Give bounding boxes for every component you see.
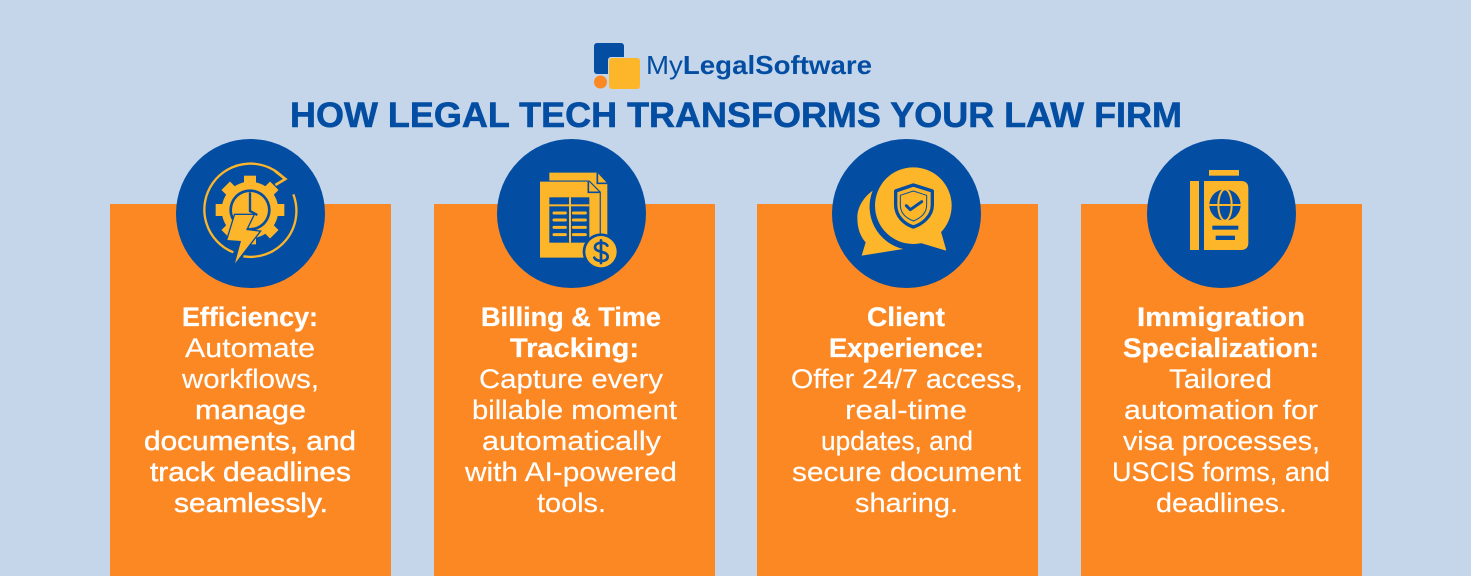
icon: chat bubbles with shield — [832, 139, 981, 288]
text: efficiency description: Automate — [185, 333, 315, 363]
text: efficiency description: seamlessly. — [174, 488, 328, 518]
text: client experience description: real-time — [845, 395, 967, 425]
panel: immigration specialization — [1081, 139, 1362, 576]
text: immigration description — [1112, 364, 1330, 518]
heading: billing and time tracking — [481, 302, 661, 363]
text: efficiency description: track deadlines — [150, 457, 351, 487]
text: client experience description: updates, and — [821, 426, 973, 456]
panel: efficiency — [110, 139, 391, 576]
title: HOW LEGAL TECH TRANSFORMS YOUR LAW FIRM — [290, 96, 1182, 135]
text: client experience description: secure document — [792, 457, 1022, 487]
text: immigration description: deadlines. — [1156, 488, 1287, 518]
text: billing description — [464, 364, 678, 518]
text: efficiency description: workflows, — [181, 364, 319, 394]
heading: client experience — [829, 302, 984, 363]
heading: immigration specialization: Immigration — [1137, 302, 1305, 332]
heading: immigration specialization: Specialization: — [1123, 333, 1319, 363]
text: billing description: billable moment — [472, 395, 678, 425]
heading: billing and time tracking: Billing & Time — [481, 302, 661, 332]
text: efficiency description: manage — [195, 395, 306, 425]
panel background — [1081, 204, 1362, 576]
logo mark — [594, 43, 641, 90]
text: billing description: with AI-powered — [464, 457, 677, 487]
panel background — [110, 204, 391, 576]
panel: billing and time tracking — [434, 139, 715, 576]
panel background — [757, 204, 1038, 576]
text: client experience description: sharing. — [855, 488, 958, 518]
heading: efficiency: Efficiency: — [182, 302, 318, 332]
text: billing description: Capture every — [479, 364, 664, 394]
panel background — [434, 204, 715, 576]
text: client experience description: Offer 24/7 access, — [791, 364, 1023, 394]
panel: client experience — [757, 139, 1038, 576]
text: immigration description: automation for — [1124, 395, 1318, 425]
text: billing description: tools. — [537, 488, 606, 518]
logo wordmark: MyLegalSoftware — [646, 50, 872, 80]
text: efficiency description: documents, and — [144, 426, 356, 456]
logo — [594, 43, 872, 90]
text: immigration description: Tailored — [1169, 364, 1272, 394]
text: efficiency description — [144, 333, 356, 518]
icon: invoice documents with dollar coin — [497, 139, 646, 288]
text: immigration description: USCIS forms, and — [1112, 457, 1330, 487]
heading: billing and time tracking: Tracking: — [510, 333, 639, 363]
heading: client experience: Client — [867, 302, 945, 332]
heading: client experience: Experience: — [829, 333, 984, 363]
icon: passport with globe — [1147, 139, 1296, 288]
text: client experience description — [791, 364, 1023, 518]
text: immigration description: visa processes, — [1123, 426, 1320, 456]
heading: immigration specialization — [1123, 302, 1319, 363]
icon: gear, clock and lightning bolt — [176, 139, 325, 288]
text: billing description: automatically — [482, 426, 662, 456]
